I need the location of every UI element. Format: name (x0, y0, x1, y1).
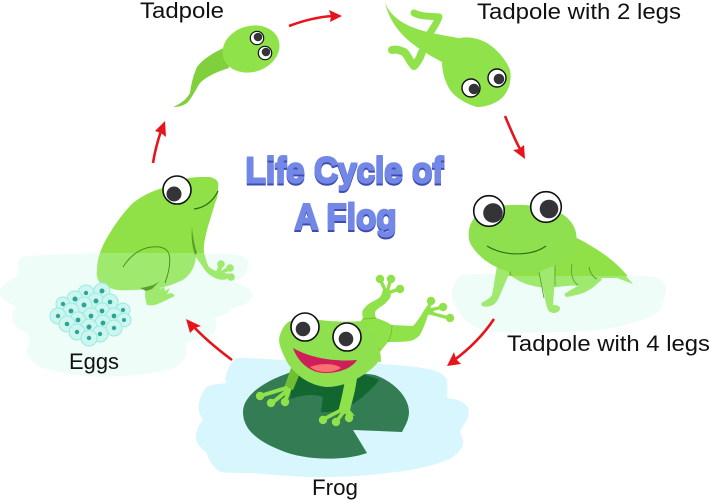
eye two (462, 79, 480, 97)
mouth line (194, 191, 218, 209)
body lower light (505, 262, 633, 297)
pupils (483, 200, 558, 223)
tadpole with two legs (385, 2, 511, 107)
eye right (531, 192, 561, 222)
eye left (291, 313, 319, 341)
main frog (256, 275, 454, 426)
eye (163, 176, 191, 204)
toes (319, 414, 353, 426)
hind leg (145, 278, 175, 305)
arrow: tadpole to two legs (289, 10, 342, 26)
head (279, 320, 381, 387)
adult frog beside eggs (97, 176, 235, 305)
smile (487, 246, 546, 254)
eye one (250, 31, 264, 45)
neck line (192, 227, 197, 255)
head (442, 37, 511, 107)
head (216, 18, 286, 80)
lower leg (392, 50, 422, 66)
pupils (254, 33, 270, 56)
title face: Life Cycle of (246, 150, 444, 190)
mouth (293, 348, 357, 373)
pupil (166, 186, 182, 202)
arrow: frog to eggs (186, 319, 232, 360)
upper leg (414, 13, 439, 36)
title shadow (246, 152, 444, 239)
label: frog: Frog (312, 475, 358, 500)
front leg right (539, 263, 560, 313)
body and tail (508, 238, 628, 276)
tongue (310, 364, 341, 372)
front leg left (481, 266, 510, 307)
hind legs (355, 275, 454, 362)
tadpole (173, 18, 286, 107)
eggs cluster (50, 283, 131, 346)
arrow: two legs to four legs (505, 116, 525, 159)
arrow: eggs to tadpole (153, 121, 166, 163)
label: eggs: Eggs (69, 349, 119, 374)
pond (196, 358, 469, 477)
pupils (469, 74, 504, 94)
title face (246, 150, 444, 237)
tail (385, 2, 462, 62)
title shadow: Life Cycle of (246, 152, 444, 192)
label: tadpole with 4 legs: Tadpole with 4 legs (507, 331, 710, 356)
tadpole with four legs (469, 192, 633, 313)
tail (173, 47, 229, 107)
title shadow: A Flog (294, 198, 396, 239)
head (469, 205, 577, 273)
thigh shadow (140, 281, 160, 291)
egg nuclei (56, 288, 126, 340)
eye one (488, 69, 506, 87)
body upper (100, 177, 218, 260)
toes (256, 392, 289, 407)
right ground blob (452, 274, 666, 333)
title face: A Flog (294, 196, 396, 237)
arrow: four legs to frog (447, 319, 494, 366)
leg lines (509, 263, 597, 298)
toes on arm (216, 260, 235, 281)
body lower light (97, 177, 227, 290)
title (246, 150, 444, 239)
toes (376, 275, 454, 322)
left front leg (256, 368, 300, 407)
pupils (296, 322, 353, 346)
pad shadow (290, 372, 379, 412)
eye two (258, 46, 272, 60)
right front leg (319, 378, 357, 426)
eye left (474, 196, 504, 226)
eye right (333, 323, 361, 351)
left ground blob (0, 253, 252, 377)
thigh line (123, 247, 170, 283)
lily pad (243, 371, 409, 459)
